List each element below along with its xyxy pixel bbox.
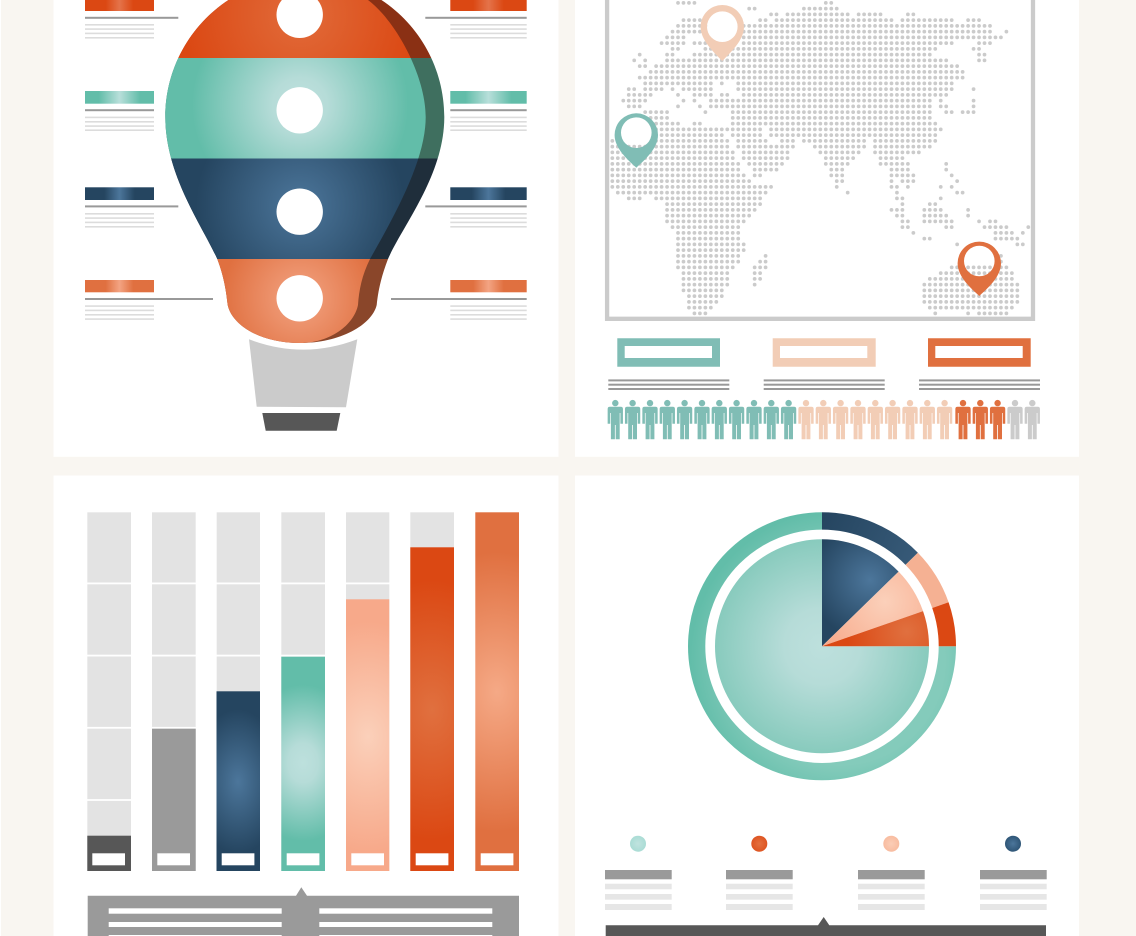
- legend item 3: [858, 836, 925, 910]
- pie: [715, 539, 929, 753]
- bar 5: [346, 599, 389, 871]
- bar 1: [87, 836, 131, 871]
- panel: bar chart: [54, 476, 558, 936]
- bulb white circles: [276, 0, 323, 321]
- right label: red: [425, 0, 527, 39]
- bar 7: [475, 512, 519, 871]
- dotted world map: [612, 3, 1032, 313]
- left label: teal: [85, 91, 154, 131]
- panel: light bulb: [54, 0, 558, 457]
- legend box: orange: [928, 338, 1031, 367]
- callout: grey text box: [88, 887, 519, 936]
- bar 6: [410, 547, 454, 871]
- right label: teal: [450, 91, 527, 131]
- panel: pie chart: [575, 476, 1079, 936]
- text lines: column 3: [919, 379, 1040, 390]
- legend box: peach: [773, 338, 876, 367]
- right label: coral: [391, 280, 527, 320]
- legend item 1: [605, 836, 672, 910]
- map frame: [607, 0, 1033, 319]
- bar 2: [152, 729, 196, 871]
- bar value labels: [92, 853, 513, 865]
- bar tracks: [87, 512, 454, 871]
- text lines: column 2: [764, 379, 885, 390]
- right label: navy: [425, 187, 527, 228]
- left label: red: [85, 0, 178, 39]
- bar 3: [216, 691, 260, 871]
- legend item 2: [726, 836, 793, 910]
- donut ring: [697, 521, 947, 772]
- left label: navy: [85, 187, 178, 228]
- map pin: peach: [701, 5, 744, 61]
- panel: world map: [575, 0, 1079, 457]
- bulb dark shadow bands: [165, 0, 444, 343]
- bulb screw base: [249, 339, 357, 407]
- legend box: teal: [617, 338, 720, 367]
- bulb front colour bands: [165, 0, 426, 343]
- icon: segmented light bulb: [150, 0, 460, 431]
- people pictogram row: [608, 400, 1040, 439]
- map pin: orange: [958, 242, 1001, 296]
- bulb cap: [262, 413, 340, 431]
- legend item 4: [980, 836, 1047, 910]
- left label: coral: [85, 280, 213, 320]
- map pin: teal: [615, 113, 658, 168]
- text lines: column 1: [608, 379, 729, 390]
- callout: dark text box: [606, 917, 1046, 936]
- bar 4: [281, 657, 325, 871]
- bar separators: [85, 582, 391, 801]
